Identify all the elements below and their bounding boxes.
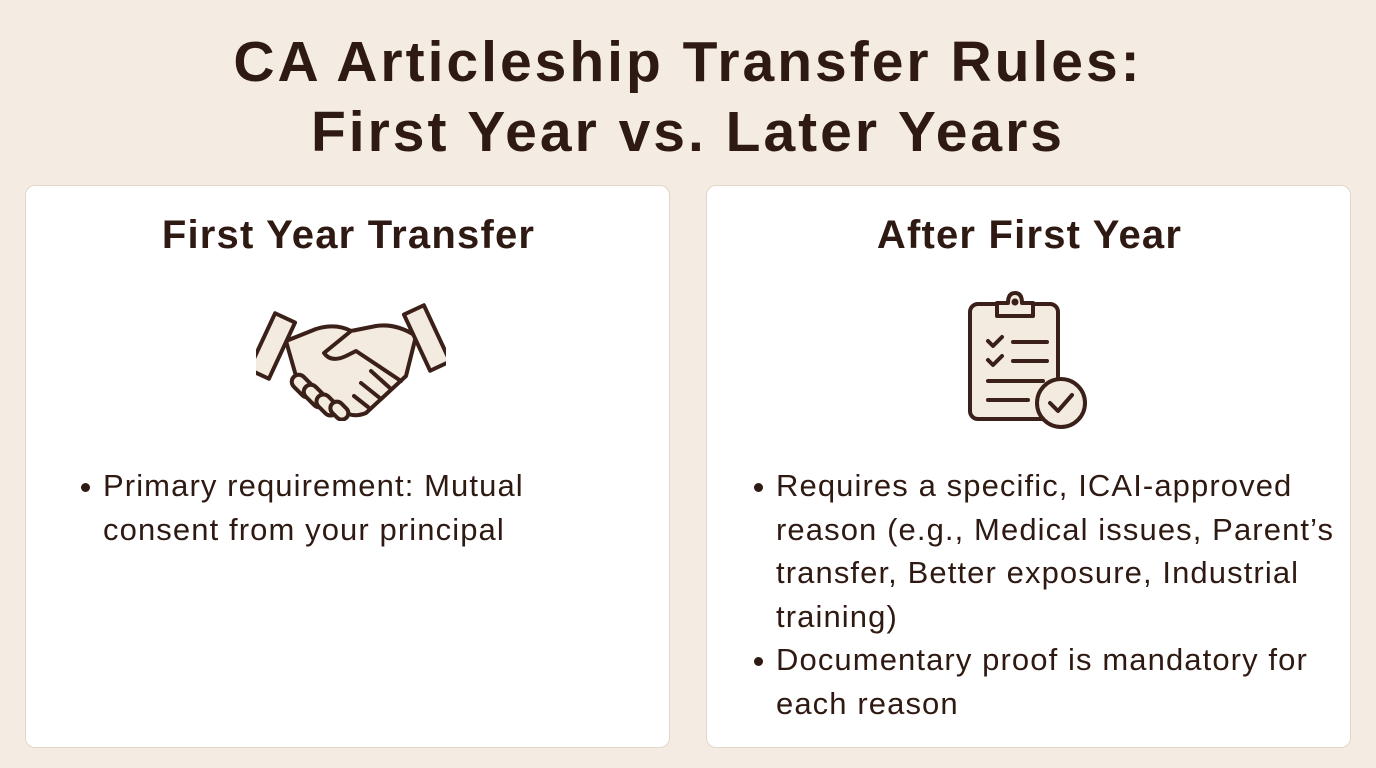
title: First Year vs. Later Years (311, 100, 1065, 164)
bullets: after first year: training) (776, 598, 898, 634)
bullets: after first year (754, 468, 1334, 720)
heading: first year transfer: First Year Transfer (162, 213, 535, 257)
bullets: after first year: reason (e.g., Medical issues, Parent’s (776, 512, 1334, 546)
bullets: first year: Primary requirement: Mutual (103, 468, 524, 503)
bullets: first year: consent from your principal (103, 512, 505, 546)
icon: handshake (256, 303, 446, 421)
title: CA Articleship Transfer Rules: (233, 30, 1143, 94)
bullets: after first year: Documentary proof is mandatory for (776, 642, 1308, 677)
panel: after first year (706, 185, 1351, 748)
bullets: after first year: transfer, Better exposure, Industrial (776, 555, 1299, 590)
bullets: after first year: each reason (776, 686, 959, 720)
bullets: first year (81, 468, 524, 546)
icon: clipboard with check (968, 291, 1087, 429)
panel: first year (25, 185, 670, 748)
title (233, 30, 1143, 164)
heading: after first year: After First Year (877, 213, 1182, 257)
bullets: after first year: Requires a specific, ICAI-approved (776, 468, 1292, 503)
